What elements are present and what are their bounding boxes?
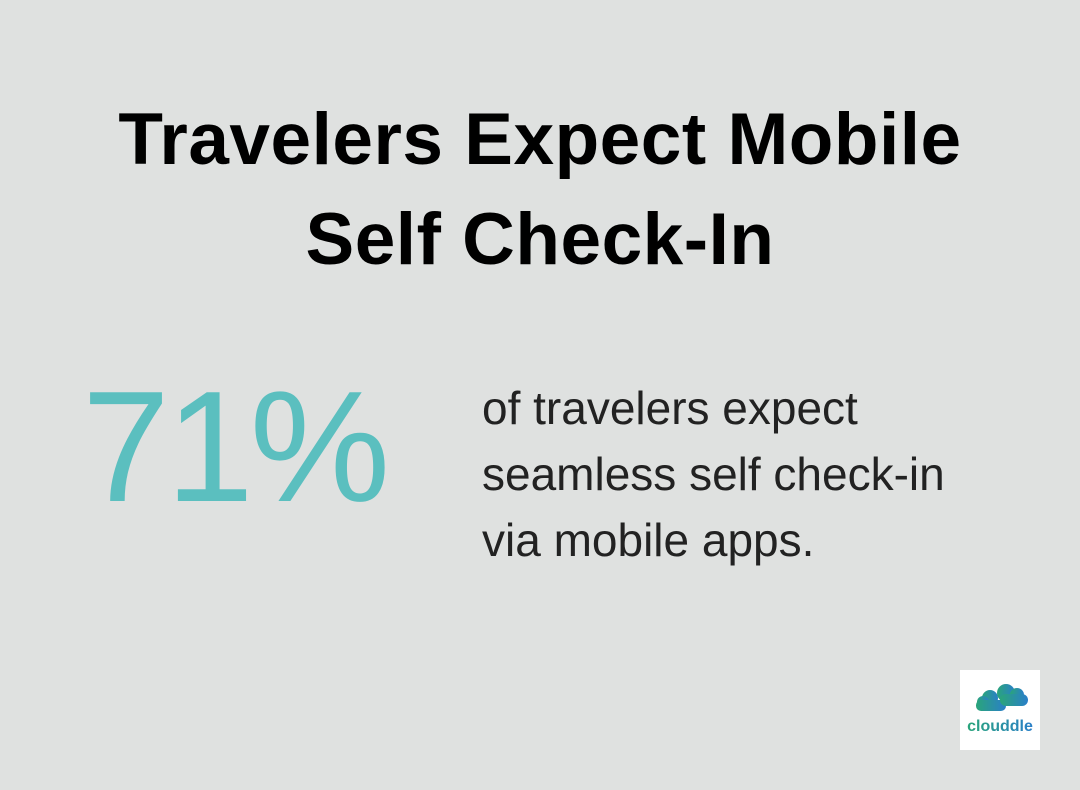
description — [482, 382, 945, 566]
statistic: 71% — [82, 359, 386, 535]
description: of travelers expect — [482, 382, 858, 434]
logo: clouddle — [967, 718, 1033, 735]
description: seamless self check-in — [482, 448, 945, 500]
title: Travelers Expect Mobile — [118, 99, 962, 180]
description: via mobile apps. — [482, 514, 814, 566]
logo — [960, 670, 1040, 750]
title — [118, 99, 962, 280]
title: Self Check-In — [306, 199, 774, 280]
